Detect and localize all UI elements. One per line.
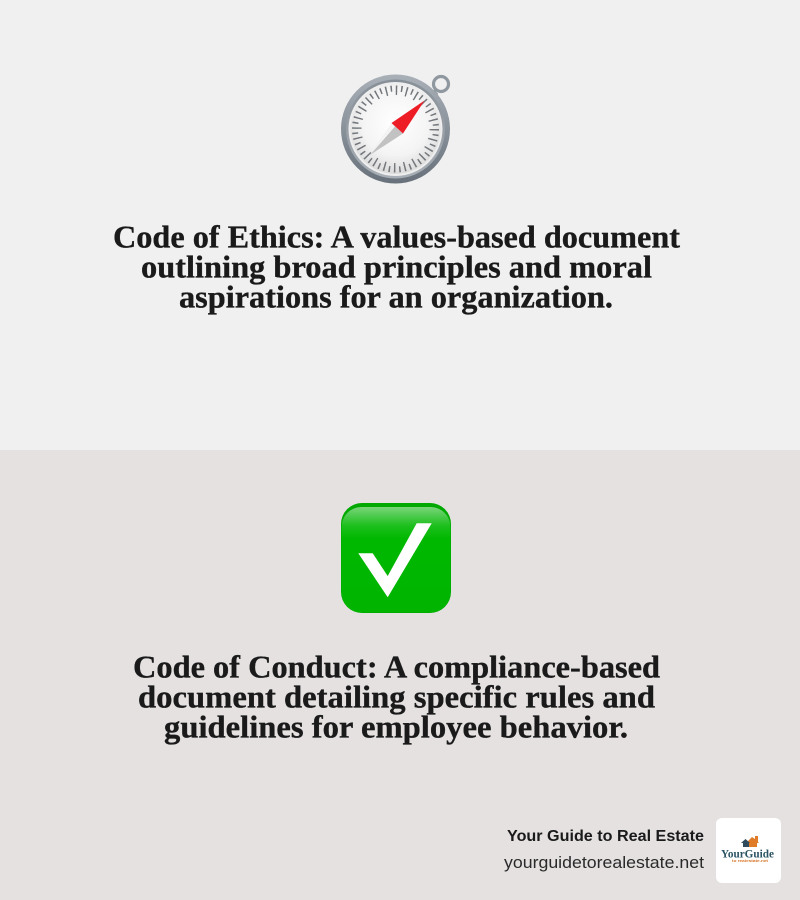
panel: code of ethics xyxy=(0,0,800,450)
footer: brand name: Your Guide to Real Estate xyxy=(507,828,704,845)
footer: logo: YourGuide xyxy=(721,848,774,860)
icon: compass xyxy=(341,74,450,184)
heading: code of ethics: aspirations for an organization. xyxy=(179,278,613,314)
heading: code of ethics: outlining broad principles and moral xyxy=(141,248,652,284)
footer: logo: to realestate.net xyxy=(732,858,769,863)
heading: code of conduct: guidelines for employee behavior. xyxy=(164,708,628,744)
compass needle: grey xyxy=(370,124,403,155)
heading: code of conduct: document detailing specific rules and xyxy=(138,678,655,714)
heading: code of conduct: Code of Conduct: A compliance-based xyxy=(133,648,660,684)
footer: logo xyxy=(716,818,781,883)
compass needle: red xyxy=(392,100,424,134)
panel: code of conduct xyxy=(0,450,800,900)
heading: code of ethics: Code of Ethics: A values-based document xyxy=(113,218,680,254)
footer: website: yourguidetorealestate.net xyxy=(504,853,704,872)
icon: check mark xyxy=(341,503,451,613)
